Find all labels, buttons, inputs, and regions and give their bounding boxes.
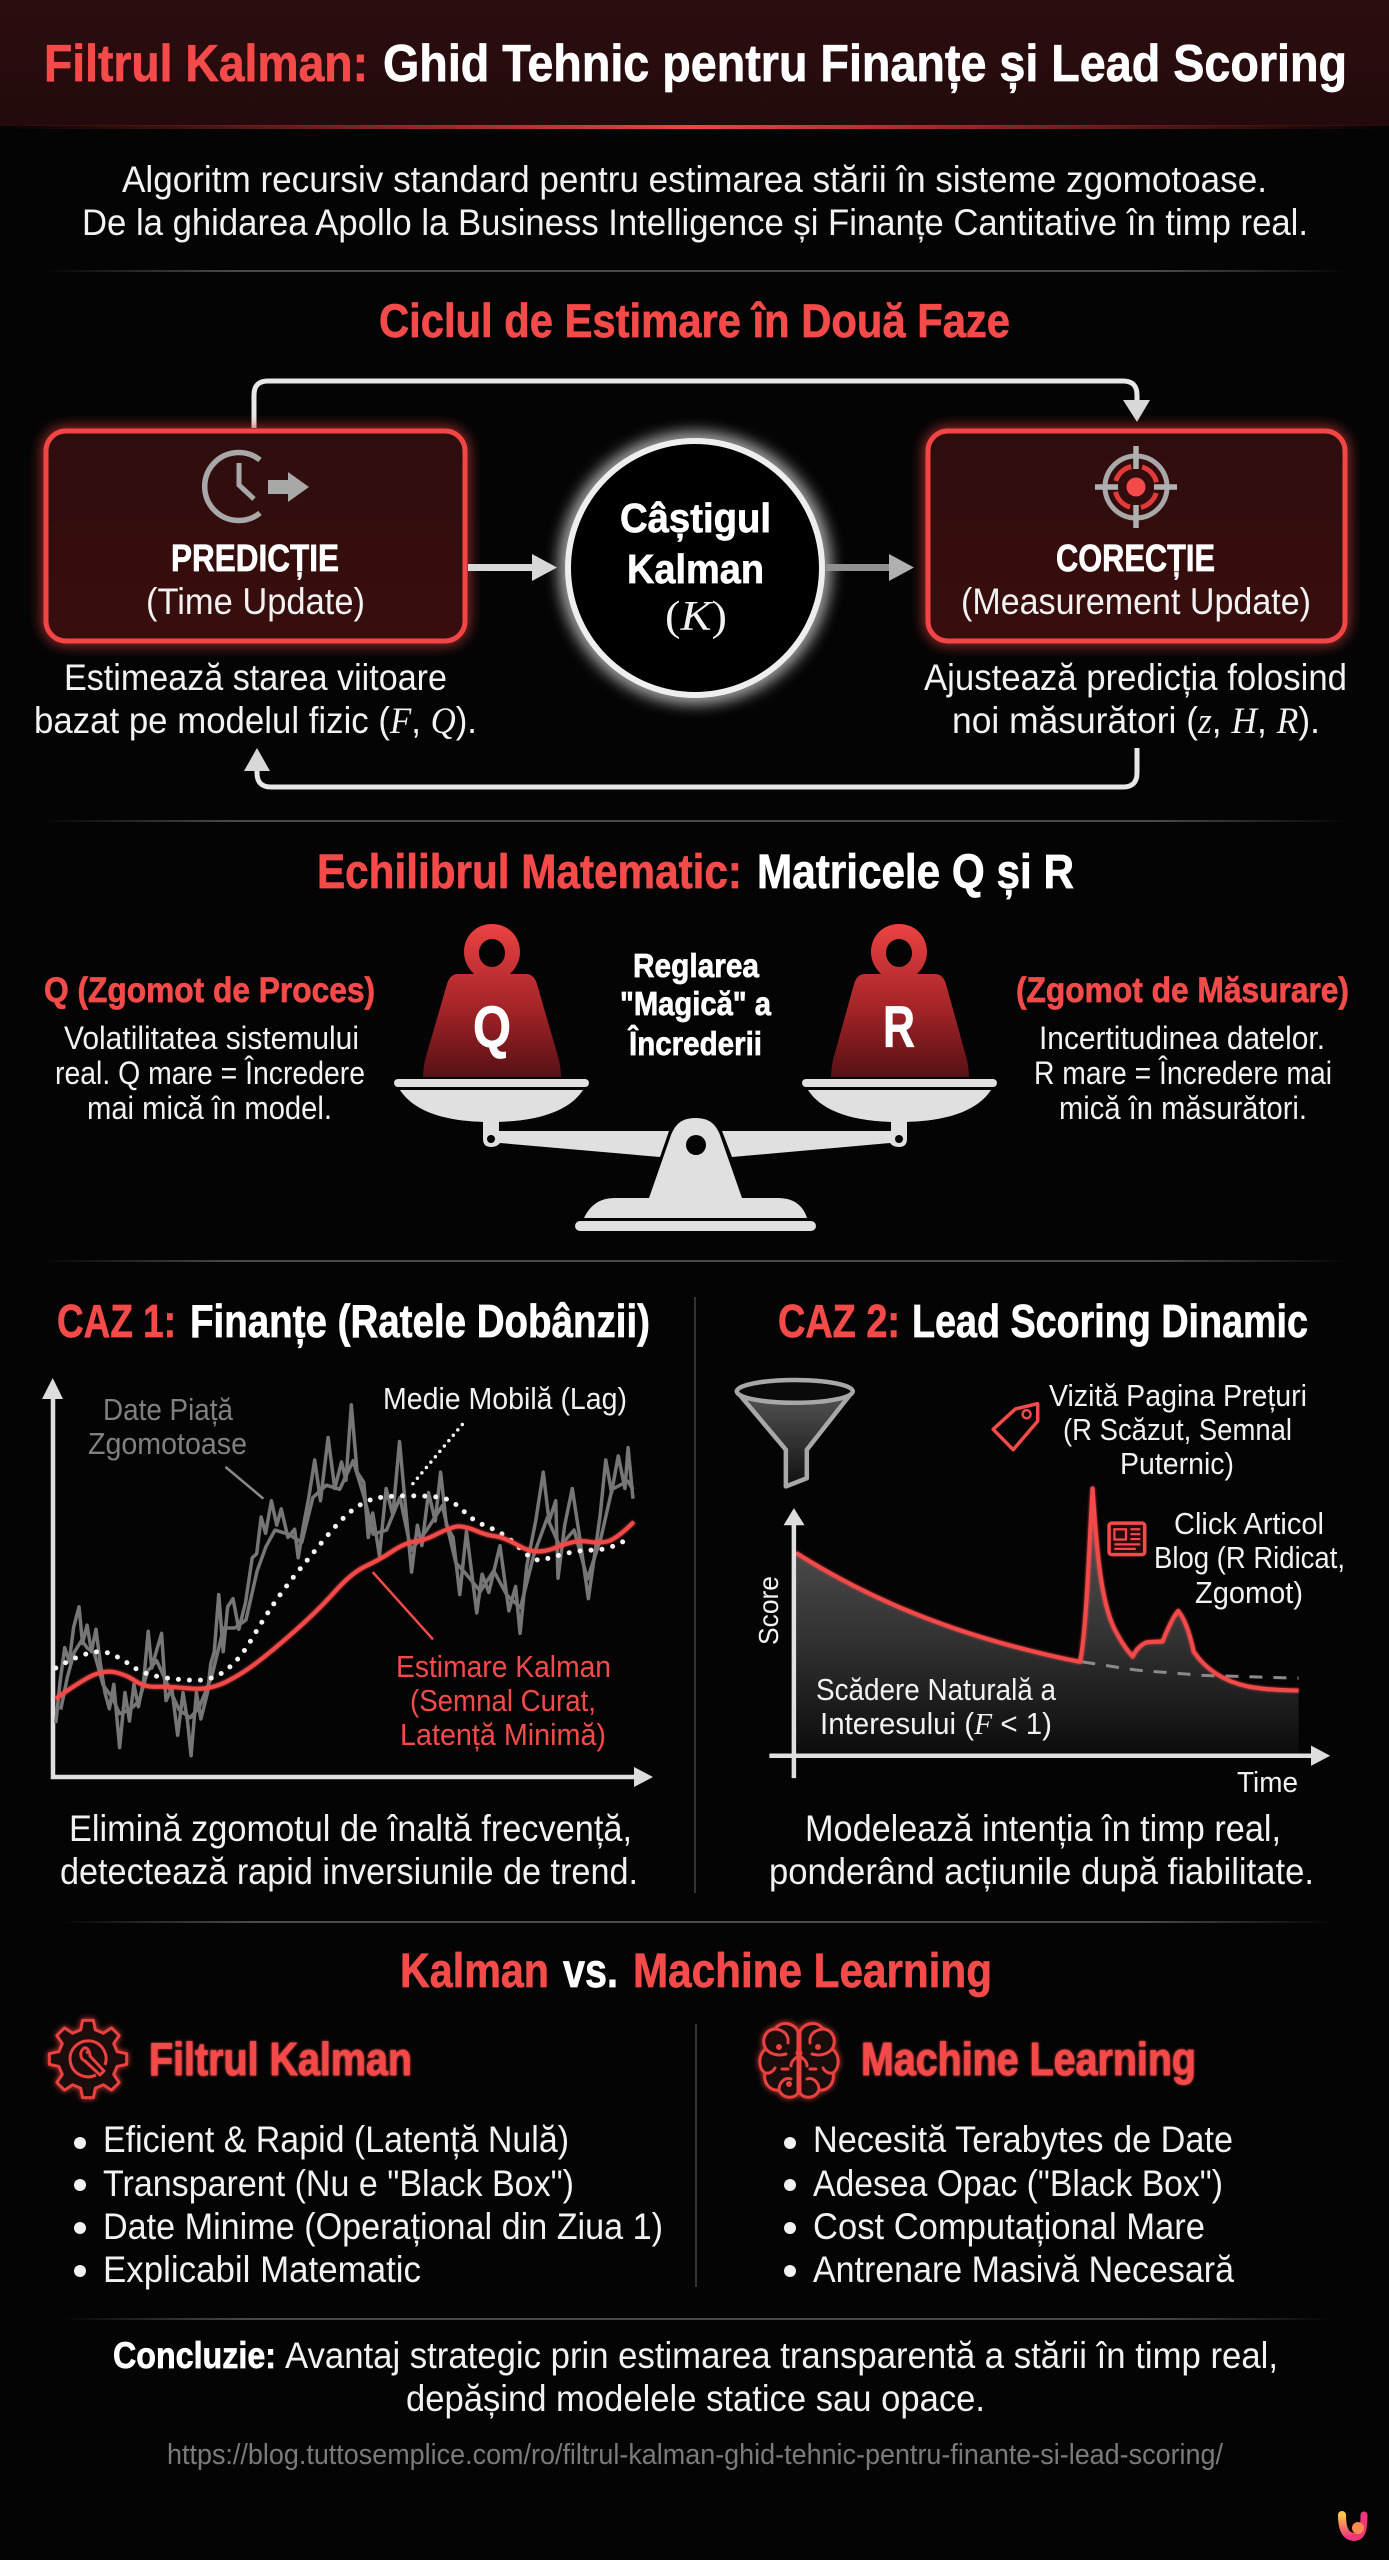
column: Kalman filter [49,2020,663,2290]
label: price page visit: (R Scăzut, Semnal [1063,1412,1292,1447]
source url: https://blog.tuttosemplice.com/ro/filtrul-kalman-ghid-tehnic-pentru-finante-si-lead-scoring/ [167,2439,1224,2471]
title banner [0,0,1389,129]
label: market data [88,1392,247,1461]
list: machine learning drawbacks: Cost Computațional Mare [813,2206,1205,2247]
icon: funnel [737,1380,853,1486]
label: prediction: PREDICȚIE [171,538,339,580]
text: magic tuning: Reglarea [633,947,760,984]
heading: balance [317,846,1074,899]
text block: Q: Volatilitatea sistemului [64,1020,359,1056]
label: market data: Date Piață [103,1392,234,1427]
text: correction description: Ajustează predicția folosind [924,657,1347,698]
text: prediction description: Estimează starea viitoare [64,657,447,698]
icon: logo [1342,2515,1364,2537]
icon: gear with wrench [49,2020,127,2098]
text block: Q: real. Q mare = Încredere [55,1055,365,1091]
heading: case 1: Finanțe (Ratele Dobânzii) [190,1295,650,1348]
heading: balance: Matricele Q și R [757,846,1074,899]
axis labels: Time [1237,1767,1298,1799]
heading: comparison [400,1945,992,1998]
arrow: prediction to gain [468,554,557,581]
series: Kalman estimate [56,1522,634,1699]
weight Q [423,924,561,1077]
panel: case 2 lead scoring [737,1295,1345,1892]
icon: brain [760,2024,838,2097]
column: Machine Learning [760,2024,1234,2290]
text: correction description [924,657,1347,742]
circle: Kalman gain: Câștigul [620,495,771,541]
panel: case 1 finance [42,1295,653,1892]
text block: R: R mare = Încredere mai [1034,1055,1332,1091]
label: moving average: Medie Mobilă (Lag) [383,1381,627,1416]
label: price page visit: Vizită Pagina Prețuri [1049,1378,1307,1413]
list: Kalman advantages: Date Minime (Operațional din Ziua 1) [103,2206,663,2247]
text block: R: mică în măsurători. [1059,1090,1307,1126]
list: Kalman advantages: Eficient & Rapid (Latență Nulă) [103,2119,569,2160]
text: magic tuning [620,947,772,1062]
text block: R [1016,971,1349,1126]
text block: R: Incertitudinea datelor. [1039,1020,1325,1056]
list: machine learning drawbacks: Adesea Opac ("Black Box") [813,2163,1223,2204]
title: Filtrul Kalman: [44,35,368,93]
conclusion: Concluzie: [113,2335,276,2376]
conclusion: Avantaj strategic prin estimarea transparentă a stării în timp real, [285,2335,1278,2376]
label: blog click: Blog (R Ridicat, [1154,1540,1345,1575]
label: Kalman estimate: Latență Minimă) [400,1717,606,1752]
label: prediction [146,538,365,622]
label: blog click: Click Articol [1174,1506,1324,1541]
caption: case 1: Elimină zgomotul de înaltă frecvență, [69,1808,632,1849]
label: natural decay: Interesului (F < 1) [820,1706,1052,1741]
list: Kalman advantages: Explicabil Matematic [103,2249,421,2290]
heading: case 2 [778,1295,1308,1347]
label: Kalman estimate [396,1649,611,1752]
series: market data [56,1405,633,1756]
label: blog click [1154,1506,1345,1610]
panel: Q and R balance [44,846,1349,1231]
arrow: gain to correction [826,554,914,581]
heading: cycle: Ciclul de Estimare în Două Faze [379,294,1010,347]
text: prediction description: bazat pe modelul fizic (F, Q). [34,700,477,742]
panel: estimation cycle [34,294,1347,787]
caption: case 2: Modelează intenția în timp real, [805,1808,1281,1849]
circle: Kalman gain: (K) [665,594,727,640]
label: correction [961,538,1311,622]
label: natural decay: Scădere Naturală a [816,1672,1057,1707]
heading: case 2: CAZ 2: [778,1295,900,1347]
panel: Kalman vs Machine Learning [49,1945,1234,2290]
heading: case 2: Lead Scoring Dinamic [912,1295,1308,1347]
text: prediction description [34,657,477,742]
chart: score over time [769,1488,1330,1778]
subtitle: Algoritm recursiv standard pentru estimarea stării în sisteme zgomotoase. [122,159,1267,200]
label: correction: (Measurement Update) [961,581,1311,622]
text: correction description: noi măsurători (z, H, R). [952,700,1320,742]
heading: comparison: Machine Learning [633,1945,992,1998]
caption: case 2 [769,1808,1314,1892]
list: Kalman advantages: Transparent (Nu e "Black Box") [103,2163,574,2204]
heading: comparison: vs. [563,1945,618,1998]
label: price page visit: Puternic) [1120,1446,1234,1481]
caption: case 1 [60,1808,638,1892]
label: Kalman estimate: Estimare Kalman [396,1649,611,1684]
circle: Kalman gain: Kalman [627,546,764,592]
list: machine learning drawbacks [784,2119,1234,2290]
caption: case 1: detectează rapid inversiunile de trend. [60,1851,638,1892]
label: market data: Zgomotoase [88,1426,247,1461]
heading: comparison: Kalman [400,1945,549,1998]
icon: price tag [993,1404,1038,1450]
label: Kalman estimate: (Semnal Curat, [410,1683,596,1718]
text: magic tuning: Încrederii [627,1025,762,1062]
label: Kalman filter: Filtrul Kalman [149,2033,412,2085]
panel: correction box [928,431,1345,641]
label: natural decay [816,1672,1057,1741]
arrow: correction back to prediction (bottom loop) [244,748,1137,787]
subtitle: De la ghidarea Apollo la Business Intelligence și Finanțe Cantitative în timp real. [82,202,1308,243]
weight Q: Q [473,995,511,1060]
text block: R: (Zgomot de Măsurare) [1016,971,1349,1010]
list: Kalman advantages [74,2119,663,2290]
icon: target [1095,446,1177,528]
heading: case 1 [57,1295,650,1348]
label: prediction: (Time Update) [146,581,365,622]
list: machine learning drawbacks: Necesită Terabytes de Date [813,2119,1233,2160]
text block: Q: Q (Zgomot de Proces) [44,971,375,1010]
axis labels [753,1576,1298,1799]
arrow: prediction to correction (top loop) [254,381,1150,428]
heading: case 1: CAZ 1: [57,1295,176,1347]
illustration: balance scale [394,924,997,1231]
axis labels: Score [753,1576,784,1645]
weight R [831,924,969,1077]
pans, beam and base [394,1079,997,1231]
label: price page visit [1049,1378,1307,1481]
text block: Q: mai mică în model. [87,1090,332,1126]
conclusion [113,2335,1278,2419]
subtitle [82,159,1308,243]
chart: noisy data, moving average, Kalman estimate [42,1378,653,1787]
caption: case 2: ponderând acțiunile după fiabilitate. [769,1851,1314,1892]
circle: Kalman gain [568,441,822,695]
list: machine learning drawbacks: Antrenare Masivă Necesară [813,2249,1234,2290]
icon: clock with arrow [205,452,309,520]
conclusion: depășind modelele statice sau opace. [406,2378,985,2419]
text block: Q [44,971,375,1126]
label: correction: CORECȚIE [1056,538,1215,580]
label: blog click: Zgomot) [1195,1575,1303,1610]
series: moving average [56,1496,632,1680]
weight R: R [883,995,915,1060]
text: magic tuning: "Magică" a [620,985,772,1022]
icon: article [1109,1523,1145,1555]
heading: balance: Echilibrul Matematic: [317,846,742,899]
leader lines [225,1423,463,1639]
panel: prediction box [46,431,465,641]
label: machine learning: Machine Learning [861,2033,1196,2085]
